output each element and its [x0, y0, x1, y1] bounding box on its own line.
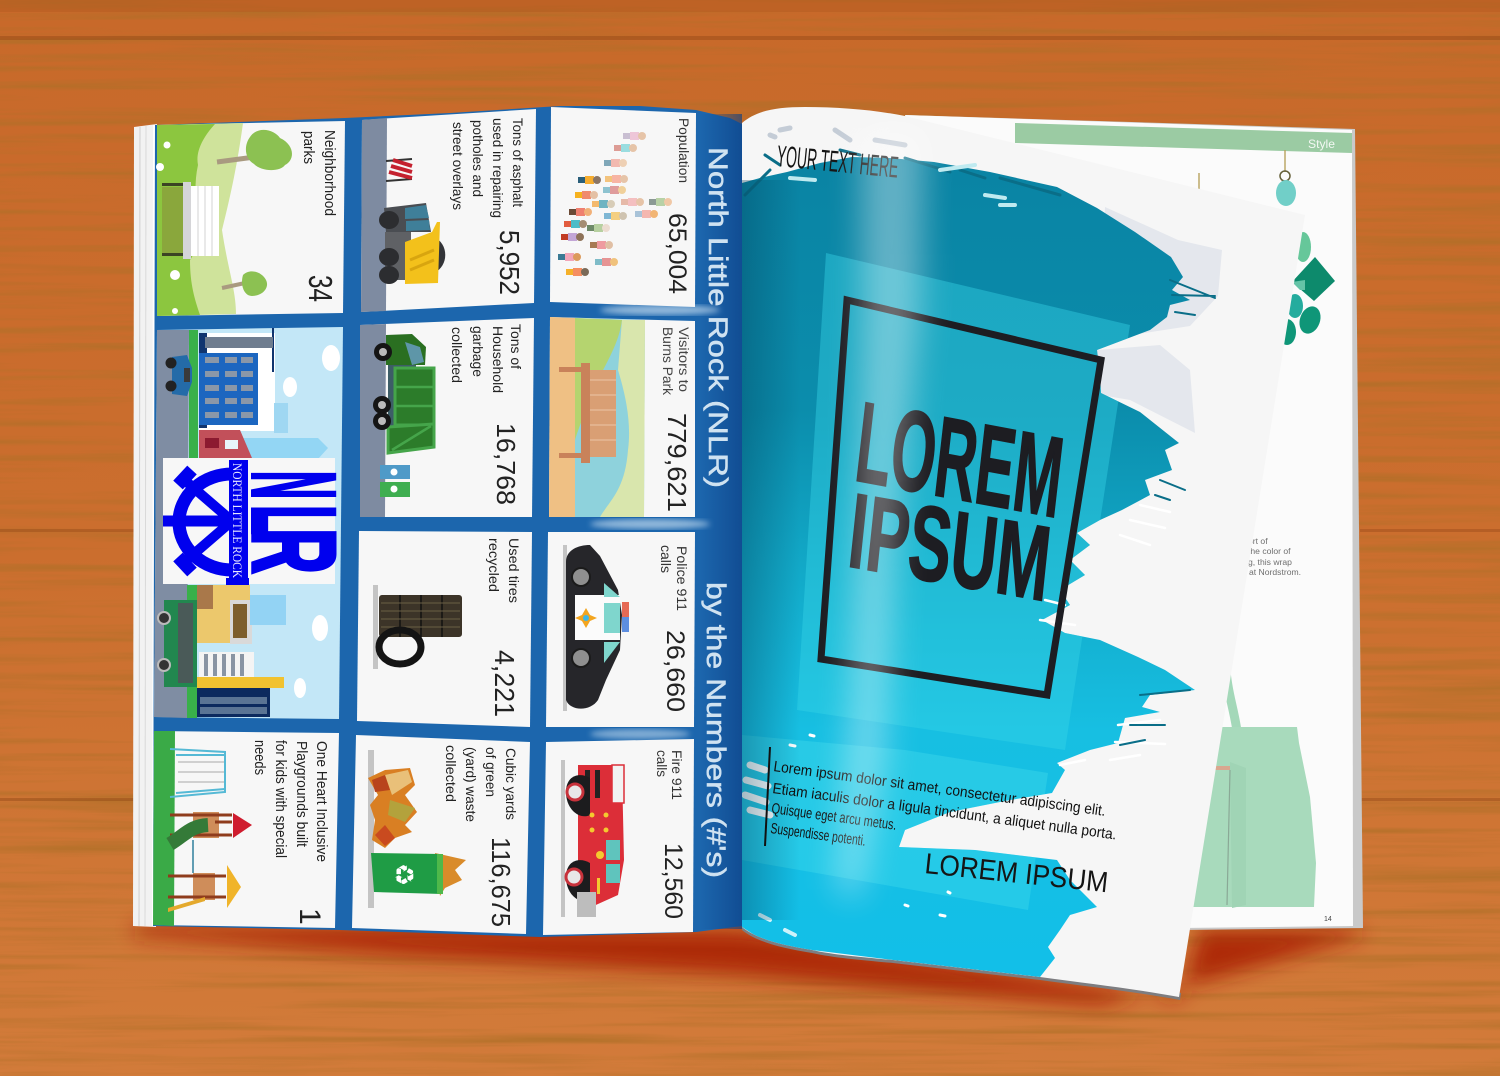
- panel: garbage: [360, 318, 534, 517]
- right magazine page: brush ad: [742, 107, 1305, 1000]
- panel: garbage: collected: [449, 327, 465, 383]
- panel: population: 65,004: [663, 213, 691, 294]
- article text fragment: ort of: [1248, 536, 1268, 546]
- big lorem ipsum heading: [850, 402, 1064, 602]
- panel: neighborhood parks: [156, 121, 345, 316]
- icon: park bench: [162, 182, 219, 259]
- panel: fire 911 calls: [543, 739, 694, 935]
- icon: crowd of people: [558, 132, 672, 276]
- panel: green yard waste: Cubic yards: [503, 748, 519, 820]
- article text fragment: g, this wrap: [1248, 557, 1292, 567]
- icon: garbage truck: [373, 334, 434, 453]
- panel: playgrounds: needs: [251, 740, 267, 775]
- panel: neighborhood parks: Neighborhood: [321, 130, 337, 216]
- panel: population: Population: [676, 118, 691, 183]
- icon: recycling bins: [380, 465, 410, 497]
- panel: green yard waste: of green: [483, 747, 499, 797]
- panel: city illustration with logo: [154, 327, 359, 719]
- earrings product photo: [1199, 150, 1335, 345]
- icon: park bench: [559, 363, 616, 463]
- panel: fire 911 calls: 12,560: [659, 843, 687, 919]
- panel: green yard waste: (yard) waste: [463, 747, 479, 822]
- page title vertical: [701, 147, 733, 878]
- panel: used tires: Used tires: [506, 538, 522, 603]
- icon: police car: [563, 545, 629, 711]
- lorem ipsum caption: LOREM IPSUM: [923, 848, 1110, 899]
- black frame: [821, 300, 1101, 695]
- icon: road barrier: [386, 159, 412, 181]
- icon: flowers: [156, 142, 180, 314]
- icon: green trolley: [158, 600, 197, 687]
- icon: skyline: [199, 403, 328, 459]
- page number: 14: [1324, 916, 1332, 923]
- logo: NLR wheel: NORTH LITTLE ROCK: [230, 463, 245, 579]
- panel: green yard waste: 116,675: [486, 837, 516, 927]
- panel: garbage: garbage: [470, 326, 486, 377]
- article text fragment: at Nordstrom.: [1249, 567, 1301, 577]
- article text fragment: [1248, 536, 1301, 577]
- panel: asphalt: [361, 109, 536, 312]
- panel: playgrounds: [153, 731, 339, 928]
- panel: garbage: Tons of: [508, 324, 524, 369]
- panel: population: [550, 107, 696, 307]
- logo: NLR wheel: [163, 458, 359, 585]
- magazine shadow on table: [135, 925, 1362, 1005]
- panel: police 911 calls: Police 911: [674, 546, 689, 611]
- panel: asphalt: Tons of asphalt: [510, 118, 526, 207]
- icon: clouds: [283, 345, 340, 698]
- panel: playgrounds: Playgrounds built: [293, 741, 309, 847]
- page title vertical: by the Numbers (#'s): [701, 582, 731, 878]
- panel: playgrounds: for kids with special: [272, 740, 288, 858]
- blue page background: [153, 106, 742, 937]
- panel: asphalt: used in repairing: [490, 118, 506, 218]
- panel: asphalt: potholes and: [470, 120, 486, 197]
- paint spray details: [745, 505, 1170, 935]
- page title vertical: North Little Rock (NLR): [703, 147, 733, 488]
- icon: trees: [217, 130, 292, 296]
- right magazine page: brush ad: YOUR TEXT HERE: [775, 140, 900, 185]
- icon: swing set: [170, 749, 225, 797]
- panel: playgrounds: One Heart Inclusive: [313, 741, 329, 862]
- big lorem ipsum heading: LOREM: [850, 379, 1069, 543]
- panel: used tires: [357, 531, 532, 727]
- paragraph block: Quisque eget arcu metus.: [770, 800, 898, 834]
- logo: NLR wheel: N: [227, 471, 359, 499]
- big lorem ipsum heading: IPSUM: [844, 471, 1056, 624]
- panel: green yard waste: [352, 735, 530, 934]
- stacked paper edge: [133, 124, 157, 927]
- article text fragment: the color of: [1248, 546, 1291, 556]
- icon: stacked tires: [373, 585, 462, 669]
- paragraph block: Suspendisse potenti.: [769, 820, 867, 850]
- panel: neighborhood parks: 34: [302, 275, 339, 302]
- panel: used tires: recycled: [486, 538, 502, 592]
- green style header band: Style: [1308, 137, 1335, 151]
- back page: style article: [905, 115, 1363, 930]
- icon: play tower with slide: [170, 812, 252, 873]
- panel: fire 911 calls: calls: [654, 750, 669, 777]
- icon: dump truck: [379, 203, 445, 284]
- spine shadow: [742, 180, 794, 920]
- panel: asphalt: 5,952: [494, 230, 525, 295]
- icon: lower city buildings: [197, 585, 286, 717]
- icon: fire truck: [561, 760, 624, 917]
- icon: leaves and green bin: ♻: [388, 863, 418, 886]
- panel: burns park visitors: 779,621: [662, 413, 692, 512]
- panel: police 911 calls: [546, 532, 695, 727]
- panel: asphalt: street overlays: [450, 122, 466, 210]
- icon: blue car: [166, 355, 192, 396]
- glossy highlight: [835, 130, 925, 900]
- mint handbag photo: [1185, 670, 1316, 908]
- paragraph block: [765, 747, 1118, 850]
- green style header band: [1015, 123, 1352, 153]
- panel: fire 911 calls: Fire 911: [669, 750, 684, 800]
- icon: blue office building: [199, 328, 275, 431]
- panel: burns park visitors: [549, 317, 695, 517]
- icon: leaves and green bin: [368, 750, 466, 908]
- panel: burns park visitors: Visitors to: [676, 327, 691, 392]
- panel: garbage: 16,768: [491, 423, 521, 505]
- pale brush edge wash: [1097, 207, 1222, 433]
- lighter lower band: [742, 735, 1048, 910]
- panel: police 911 calls: 26,660: [661, 630, 689, 712]
- panel: burns park visitors: Burns Park: [660, 327, 675, 395]
- brush stroke paint area: [742, 157, 1195, 977]
- paragraph block: Lorem ipsum dolor sit amet, consectetur adipiscing elit.: [772, 758, 1107, 820]
- panel: used tires: 4,221: [489, 650, 520, 717]
- panel: police 911 calls: calls: [658, 545, 673, 573]
- logo: NLR wheel: L: [227, 505, 359, 535]
- paragraph block: Etiam iaculis dolor a ligula tincidunt, a aliquet nulla porta.: [771, 780, 1118, 843]
- panel: garbage: Household: [490, 326, 506, 393]
- left magazine page: [133, 106, 742, 937]
- panel: green yard waste: collected: [443, 745, 459, 802]
- panel: neighborhood parks: parks: [300, 131, 316, 164]
- icon: play tower with ladder: [168, 865, 241, 912]
- panel: playgrounds: 1: [293, 908, 326, 925]
- logo: NLR wheel: R: [227, 528, 359, 574]
- lighter square behind frame: [797, 253, 1130, 750]
- crease highlights: [600, 305, 720, 315]
